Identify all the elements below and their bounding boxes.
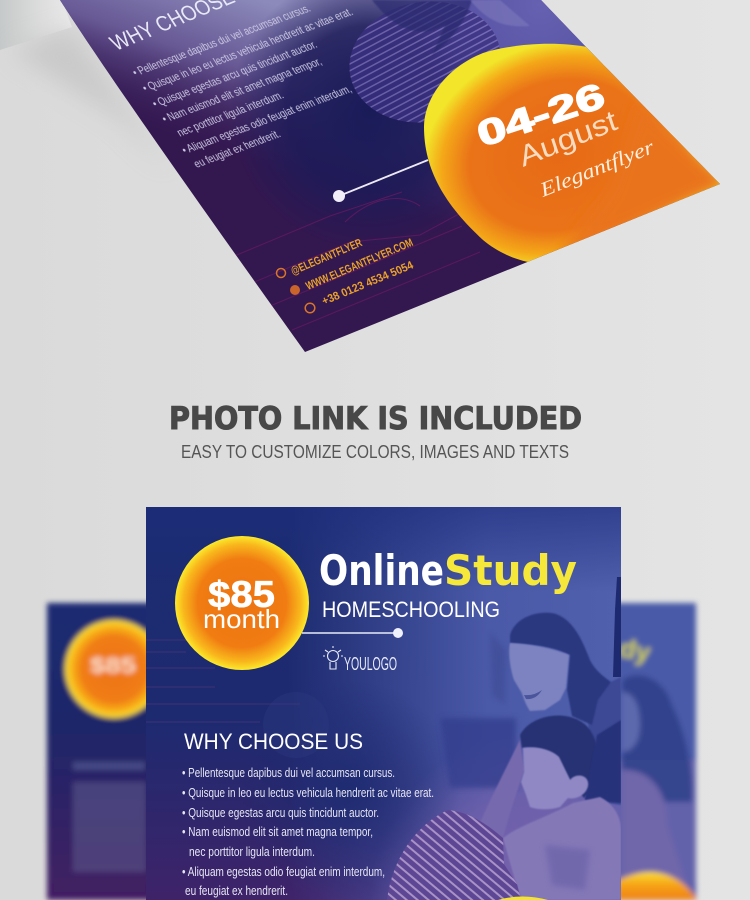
- logo: [323, 646, 396, 670]
- bullet list: eu feugiat ex hendrerit.: [192, 129, 283, 171]
- bullet list: • Nam euismod elit sit amet magna tempor,: [182, 824, 373, 839]
- price badge: [175, 536, 309, 670]
- subheading: EASY TO CUSTOMIZE COLORS, IMAGES AND TEXTS: [181, 442, 569, 462]
- contact details: [276, 237, 416, 313]
- subtitle: HOMESCHOOLING: [322, 597, 500, 622]
- mother body: [585, 677, 621, 805]
- icon: social: [276, 268, 286, 278]
- blurred badge: [615, 872, 697, 900]
- brand signature: Elegantflyer: [536, 135, 657, 202]
- panel: main flyer: [146, 507, 621, 900]
- photo: mother and son: [440, 577, 621, 900]
- bullet list: • Aliquam egestas odio feugiat enim interdum,: [180, 84, 354, 157]
- heading: why choose us: WHY CHOOSE US: [184, 729, 363, 754]
- bullet list: eu feugiat ex hendrerit.: [185, 883, 288, 898]
- mother arm: [480, 740, 524, 838]
- bullet list: • Nam euismod elit sit amet magna tempor,: [160, 56, 324, 125]
- icon: bulb: [323, 646, 343, 669]
- connector line: [333, 160, 428, 202]
- boy face: [521, 747, 588, 809]
- blurred people: [622, 675, 692, 802]
- icon: phone: [305, 303, 315, 313]
- bullet list: nec porttitor ligula interdum.: [175, 90, 286, 139]
- bullet list: nec porttitor ligula interdum.: [189, 844, 315, 859]
- blurred title: dy: [618, 633, 653, 668]
- title: Online: [319, 546, 444, 595]
- month: month: [203, 604, 280, 634]
- title: Study: [444, 546, 577, 595]
- dark shirt: [585, 720, 621, 803]
- mother hair: [510, 613, 611, 725]
- website: WWW.ELEGANTFLYER.COM: [304, 237, 415, 293]
- room shelves: [440, 718, 516, 788]
- mother face: [509, 643, 569, 711]
- blurred text lines: [73, 782, 146, 872]
- blurred price text: $85: [90, 653, 136, 678]
- handle: @ELEGANTFLYER: [289, 237, 365, 278]
- mother smile: [524, 690, 542, 699]
- date: 04-26: [472, 75, 609, 154]
- bullet list: • Quisque in leo eu lectus vehicula hendrerit ac vitae erat.: [182, 785, 434, 800]
- date badge: [420, 40, 730, 265]
- blurred heading line: [73, 762, 145, 770]
- bullet list: • Quisque egestas arcu quis tincidunt auctor.: [151, 39, 320, 110]
- price: $85: [208, 574, 275, 615]
- shirt print: [545, 845, 590, 890]
- connector line: [302, 628, 403, 638]
- phone: +38 0123 4534 5054: [320, 259, 416, 308]
- striped circle: [387, 810, 521, 900]
- dark circle pattern: [263, 692, 329, 758]
- soft shadow of the top flyer: [10, 28, 170, 170]
- bullet list: • Quisque egestas arcu quis tincidunt auctor.: [182, 805, 379, 820]
- price badge blurred: [65, 620, 163, 718]
- boy hair: [520, 715, 598, 798]
- month: August: [515, 103, 622, 173]
- icon: web: [290, 285, 300, 295]
- bullet list: • Pellentesque dapibus dui vel accumsan cursus.: [182, 765, 395, 780]
- panel: blurred left flyer: [47, 603, 163, 900]
- dark edge of the wall: [613, 577, 621, 677]
- bottom badge edge: [498, 896, 548, 900]
- title: [320, 553, 576, 594]
- folded sheet behind the top flyer: [0, 0, 72, 50]
- faint left lines: [146, 640, 300, 722]
- panel: blurred right flyer: [615, 603, 697, 900]
- bullet list: • Aliquam egestas odio feugiat enim interdum,: [182, 864, 385, 879]
- heading: photo link is included: PHOTO LINK IS INCLUDED: [169, 401, 582, 437]
- panel: angled flyer mockup: [60, 0, 720, 352]
- logo: YOULOGO: [344, 654, 397, 674]
- bullet list: [182, 765, 434, 898]
- boy body: [503, 797, 621, 900]
- bullet list: [131, 0, 404, 172]
